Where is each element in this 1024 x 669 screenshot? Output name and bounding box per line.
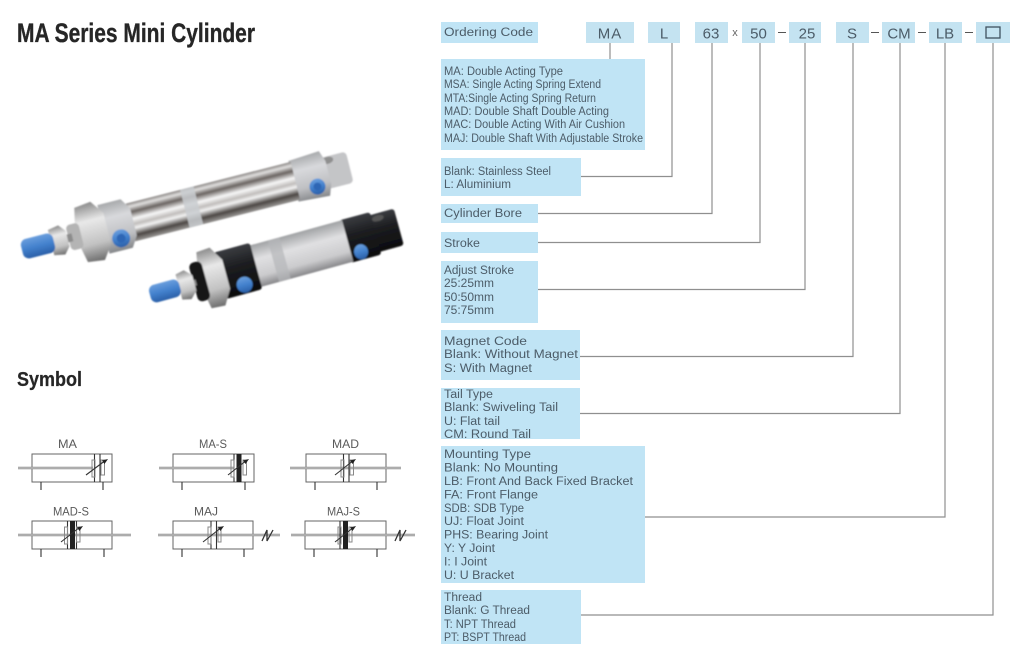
panel: material: Blank: Stainless Steel [444, 166, 551, 178]
panel: type: MSA: Single Acting Spring Extend [444, 79, 601, 91]
panel: adjust stroke [441, 261, 538, 323]
panel: tail type: Blank: Swiveling Tail [444, 402, 558, 414]
connector lines [538, 43, 993, 615]
panel: mounting type: Mounting Type [444, 449, 531, 461]
symbol: MA [18, 437, 112, 490]
panel: mounting type: UJ: Float Joint [444, 516, 525, 528]
panel: type: MAD: Double Shaft Double Acting [444, 106, 609, 118]
panel: cylinder bore [441, 204, 538, 223]
panel: magnet code: Magnet Code [444, 336, 527, 348]
symbol: MAD-S [18, 504, 131, 557]
heading: symbol: Symbol [17, 369, 82, 391]
panel: material: L: Aluminium [444, 179, 511, 191]
panel: thread: Thread [444, 592, 482, 604]
symbol: MA-S [159, 437, 254, 490]
panel: thread: PT: BSPT Thread [444, 632, 526, 644]
symbol: MA-S: MA-S [199, 437, 227, 451]
symbol: MAD [290, 437, 401, 490]
panel: tail type: CM: Round Tail [444, 429, 531, 441]
panel: mounting type: Blank: No Mounting [444, 462, 558, 474]
panel: thread [441, 590, 581, 644]
symbol: MAD-S: MAD-S [53, 504, 89, 518]
panel: mounting type: Y: Y Joint [444, 543, 496, 555]
code row: L [660, 26, 668, 42]
symbol: MAJ-S: MAJ-S [327, 504, 360, 518]
panel: type: MA: Double Acting Type [444, 66, 563, 78]
panel: material [441, 158, 581, 196]
panel: mounting type: LB: Front And Back Fixed Bracket [444, 476, 634, 488]
code row: 50 [750, 26, 767, 42]
panel: magnet code [441, 330, 580, 380]
panel: tail type: U: Flat tail [444, 416, 500, 428]
symbol: MAJ: MAJ [194, 504, 218, 518]
panel: mounting type: PHS: Bearing Joint [444, 530, 549, 542]
panel: adjust stroke: 25:25mm [444, 278, 494, 290]
code row: LB [936, 26, 954, 42]
symbol: MA: MA [58, 437, 77, 451]
panel: type: MTA:Single Acting Spring Return [444, 93, 596, 105]
code row [586, 22, 1010, 43]
panel: mounting type: SDB: SDB Type [444, 503, 524, 515]
symbol: MAD: MAD [332, 437, 359, 451]
panel: magnet code: S: With Magnet [444, 363, 533, 375]
code row: S [847, 26, 857, 42]
code row: 63 [703, 26, 719, 42]
panel: adjust stroke: Adjust Stroke [444, 265, 514, 277]
title: MA Series Mini Cylinder [17, 18, 255, 48]
code row: x [732, 27, 738, 39]
aluminium cylinder [142, 198, 407, 324]
panel: mounting type: I: I Joint [444, 556, 488, 568]
panel: tail type [441, 388, 580, 441]
panel: magnet code: Blank: Without Magnet [444, 349, 579, 361]
ordering code label [441, 22, 538, 43]
ordering code label: Ordering Code [444, 27, 533, 39]
panel: stroke: Stroke [444, 238, 480, 250]
stainless steel cylinder [15, 138, 357, 279]
product photo: two mini cylinders [15, 138, 407, 324]
code row: CM [887, 26, 911, 42]
panel: adjust stroke: 75:75mm [444, 305, 494, 317]
panel: stroke [441, 232, 538, 253]
panel: type: MAJ: Double Shaft With Adjustable Stroke [444, 133, 643, 145]
panel: thread: T: NPT Thread [444, 619, 516, 631]
panel: type: MAC: Double Acting With Air Cushion [444, 119, 625, 131]
code row: MA [598, 26, 622, 42]
panel: thread: Blank: G Thread [444, 605, 530, 617]
panel: adjust stroke: 50:50mm [444, 292, 494, 304]
panel: mounting type: U: U Bracket [444, 570, 515, 582]
symbol: MAJ-S [291, 504, 415, 557]
panel: tail type: Tail Type [444, 389, 493, 401]
code row: 25 [799, 26, 815, 42]
panel: mounting type: FA: Front Flange [444, 490, 538, 502]
panel: type [441, 59, 645, 150]
panel: cylinder bore: Cylinder Bore [444, 208, 522, 220]
panel: mounting type [441, 446, 645, 583]
symbol: MAJ [158, 504, 280, 557]
